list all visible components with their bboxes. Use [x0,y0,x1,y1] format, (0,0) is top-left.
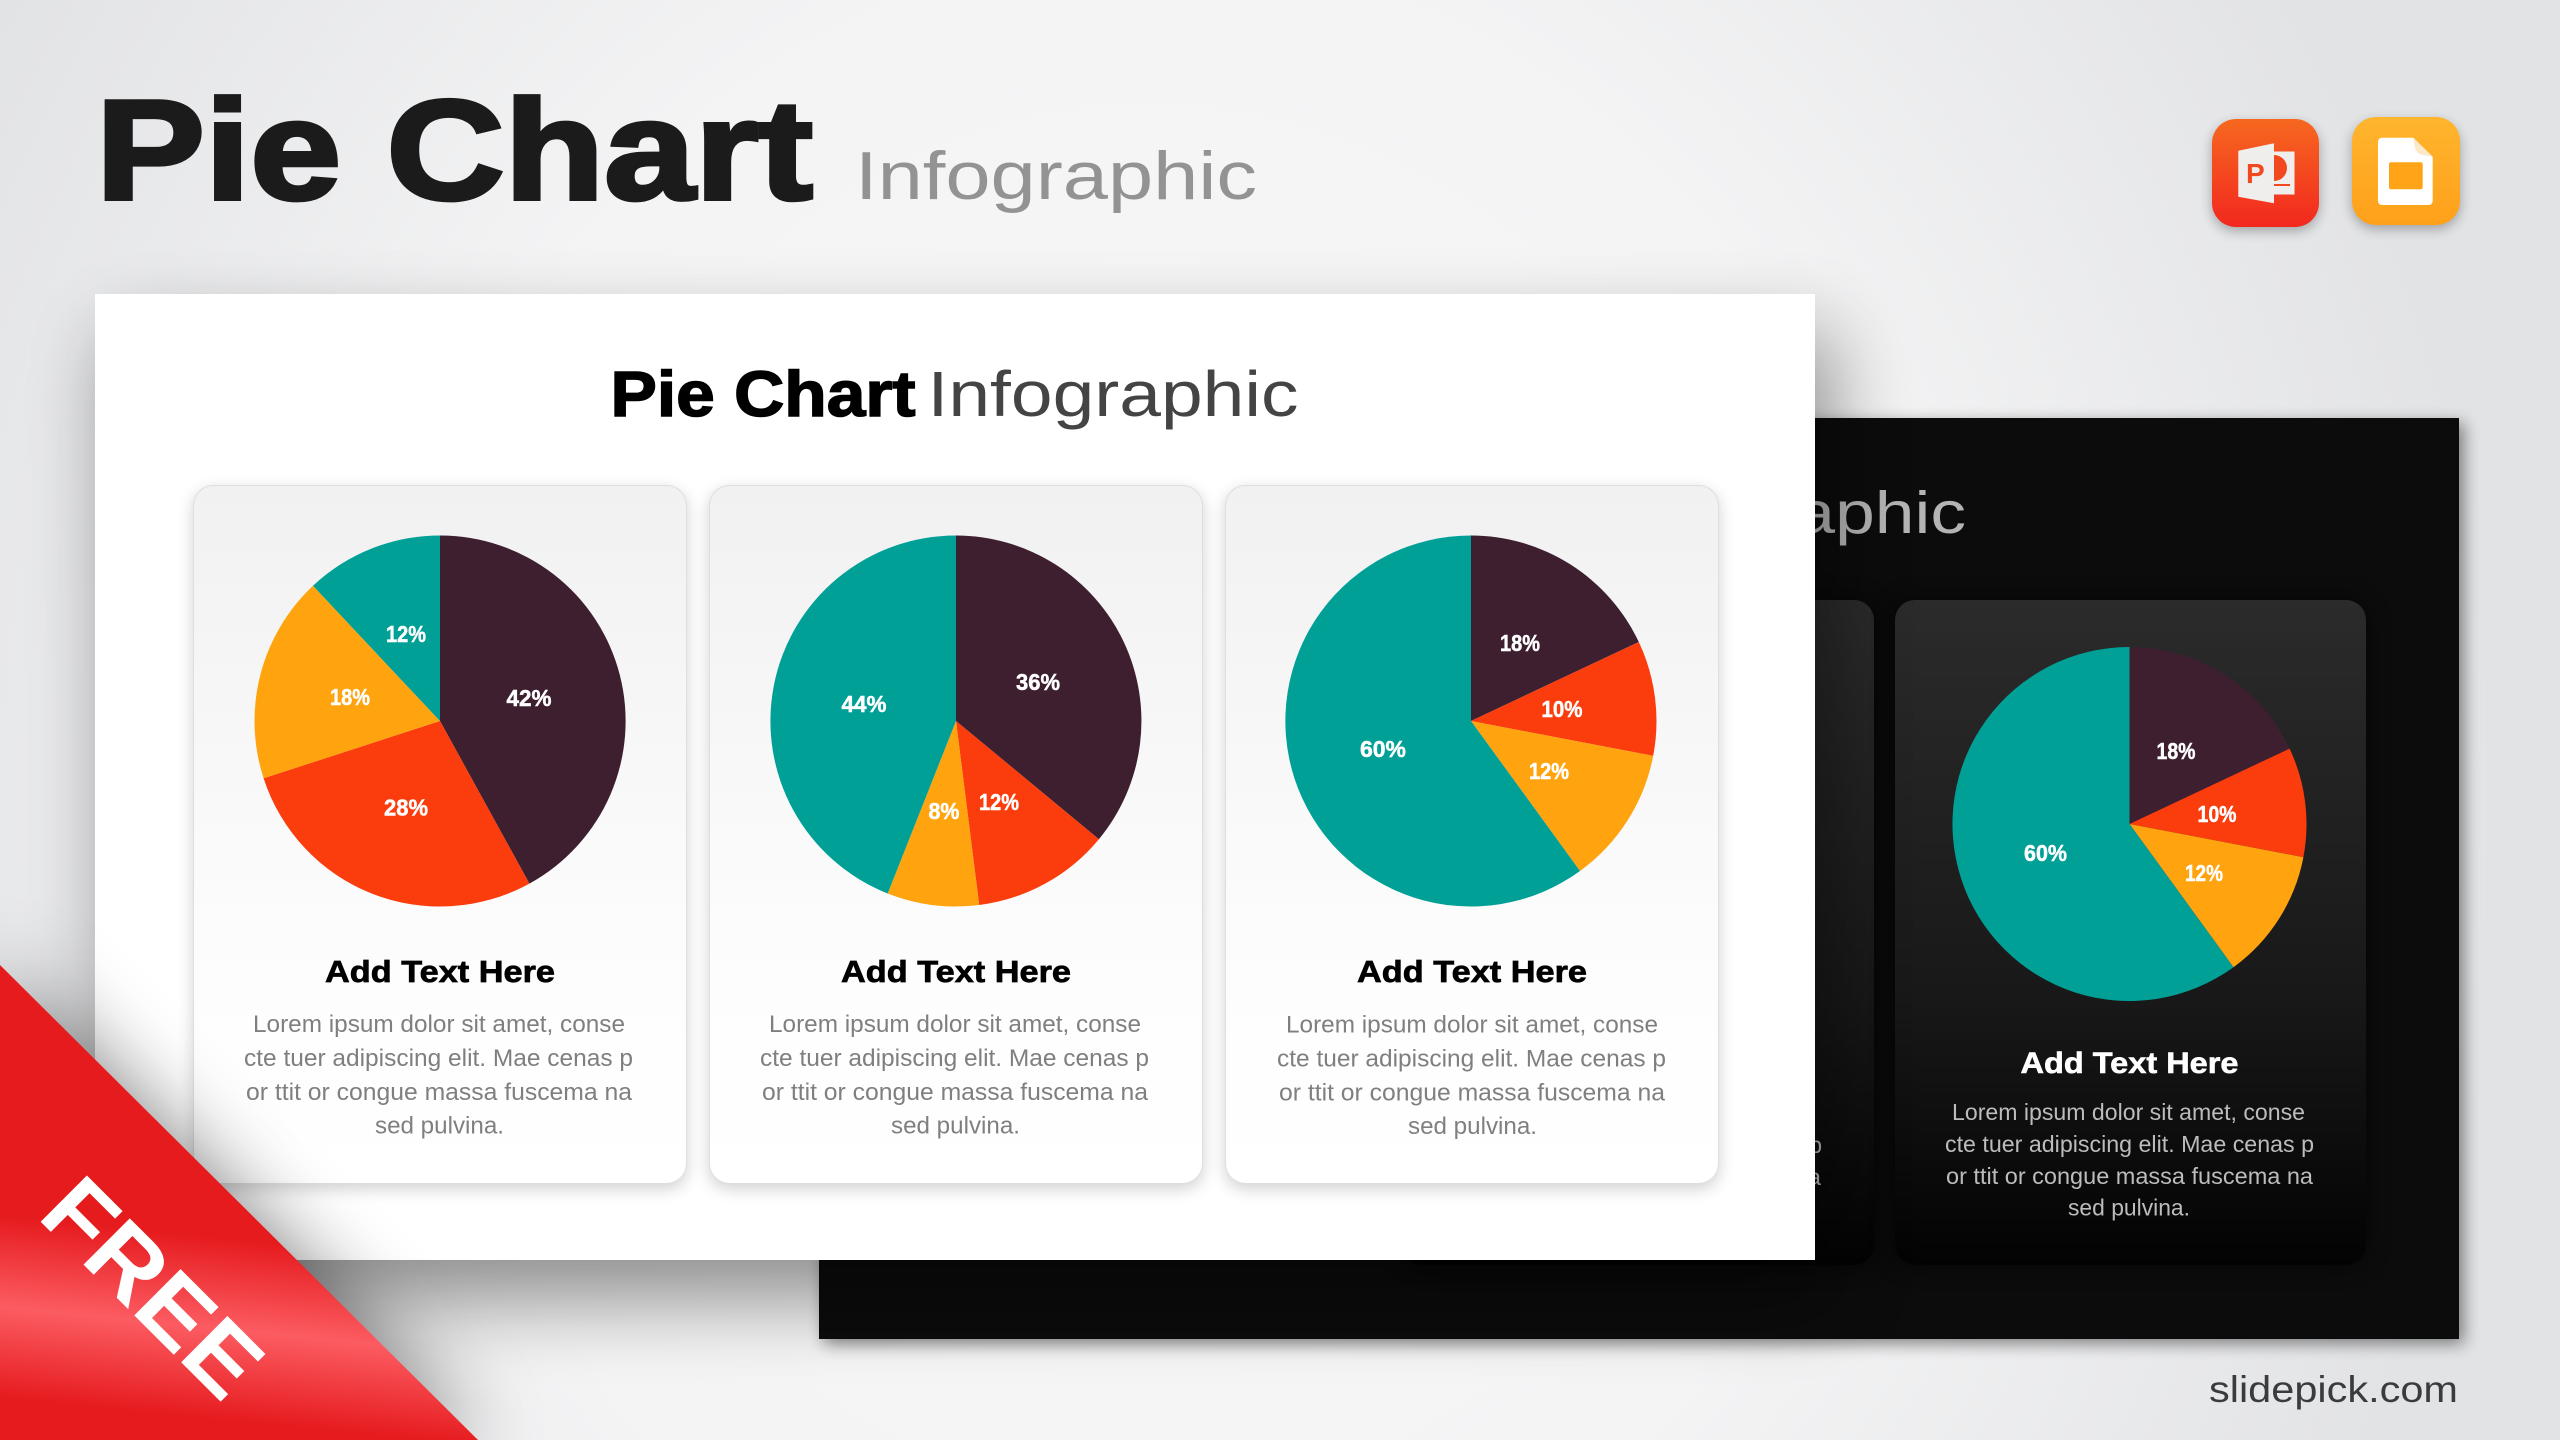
pie chart 3: 12% [1529,758,1569,784]
pie chart 3 [1285,535,1656,906]
dark card body: Lorem ipsum dolor sit amet, conse [1952,1099,2305,1125]
card 2 body: Lorem ipsum dolor sit amet, conse [769,1011,1141,1038]
pie chart 2: 8% [928,798,960,824]
pie chart: dark card: 18% [2156,738,2196,764]
white slide title: Infographic [928,358,1298,430]
white slide [95,294,1830,1300]
card 1 body: sed pulvina. [375,1112,504,1140]
card 3 body: Lorem ipsum dolor sit amet, conse [1286,1012,1658,1038]
pie chart 1: 42% [506,685,552,711]
card 2 body: cte tuer adipiscing elit. Mae cenas p [760,1045,1149,1072]
icon: PowerPoint: P [2246,158,2265,189]
pie chart: dark card [1952,647,2307,1001]
subtitle: Infographic: Infographic [855,138,1257,214]
dark card: middle: cte tuer adipiscing elit. Mae cenas p [1453,1132,1822,1158]
dark slide title: Infographic [1613,480,1966,546]
card 3 body [1277,1012,1666,1140]
card 2 [709,486,1203,1189]
pie chart: dark card: 12% [2185,860,2223,886]
icon: PowerPoint [2212,119,2319,231]
icon: Google Slides [2352,117,2460,229]
card 3 body: or ttit or congue massa fuscema na [1279,1080,1666,1106]
dark card: middle: or ttit or congue massa fuscema na [1454,1164,1821,1190]
pie chart 2: 36% [1016,669,1060,695]
pie chart 3: 10% [1542,696,1582,722]
FREE ribbon [0,965,478,1440]
dark card body [1945,1099,2314,1220]
dark card body: sed pulvina. [2068,1194,2190,1220]
card 3 [1225,486,1719,1189]
ribbon text: FREE [21,1157,283,1419]
pie chart 1 [255,536,626,907]
card 1 heading: Add Text Here [325,954,555,989]
white slide title [610,358,1298,430]
pie chart 2 [770,535,1141,906]
dark card: right [1895,600,2366,1265]
card 1 body: cte tuer adipiscing elit. Mae cenas p [244,1045,633,1072]
pie chart 1: 12% [386,621,426,647]
white slide title: Pie Chart [610,358,916,430]
dark slide [819,418,2464,1344]
website label: slidepick.com [2209,1369,2458,1410]
card 1 body: or ttit or congue massa fuscema na [246,1079,633,1106]
dark card body: or ttit or congue massa fuscema na [1946,1163,2313,1189]
card 2 body [760,1011,1149,1140]
pie chart 3: 18% [1500,630,1540,656]
pie chart: dark card: 10% [2198,801,2236,827]
main title [96,71,1257,230]
pie chart 3: 60% [1360,736,1406,762]
pie chart 1: 28% [384,794,428,820]
card 2 heading: Add Text Here [841,954,1071,989]
dark card: middle [1403,600,1874,1265]
card 1 body: Lorem ipsum dolor sit amet, conse [253,1011,625,1038]
pie chart 2: 12% [979,789,1019,815]
card 2 body: or ttit or congue massa fuscema na [762,1079,1149,1106]
dark card: middle: Lorem ipsum dolor sit amet, conse [1460,1100,1813,1126]
pie chart: dark card: 60% [2024,840,2067,866]
pie chart 2: 44% [842,691,886,717]
card 1 [193,486,687,1189]
card 3 heading: Add Text Here [1357,954,1587,989]
card 3 body: cte tuer adipiscing elit. Mae cenas p [1277,1046,1666,1072]
card 3 body: sed pulvina. [1408,1113,1537,1140]
card 2 body: sed pulvina. [891,1112,1020,1140]
dark card heading: Add Text Here [2020,1047,2238,1080]
pie chart 1: 18% [330,684,370,710]
card 1 body [244,1011,633,1140]
title: Pie Chart: Pie Chart [96,71,813,230]
dark card body: cte tuer adipiscing elit. Mae cenas p [1945,1131,2314,1157]
